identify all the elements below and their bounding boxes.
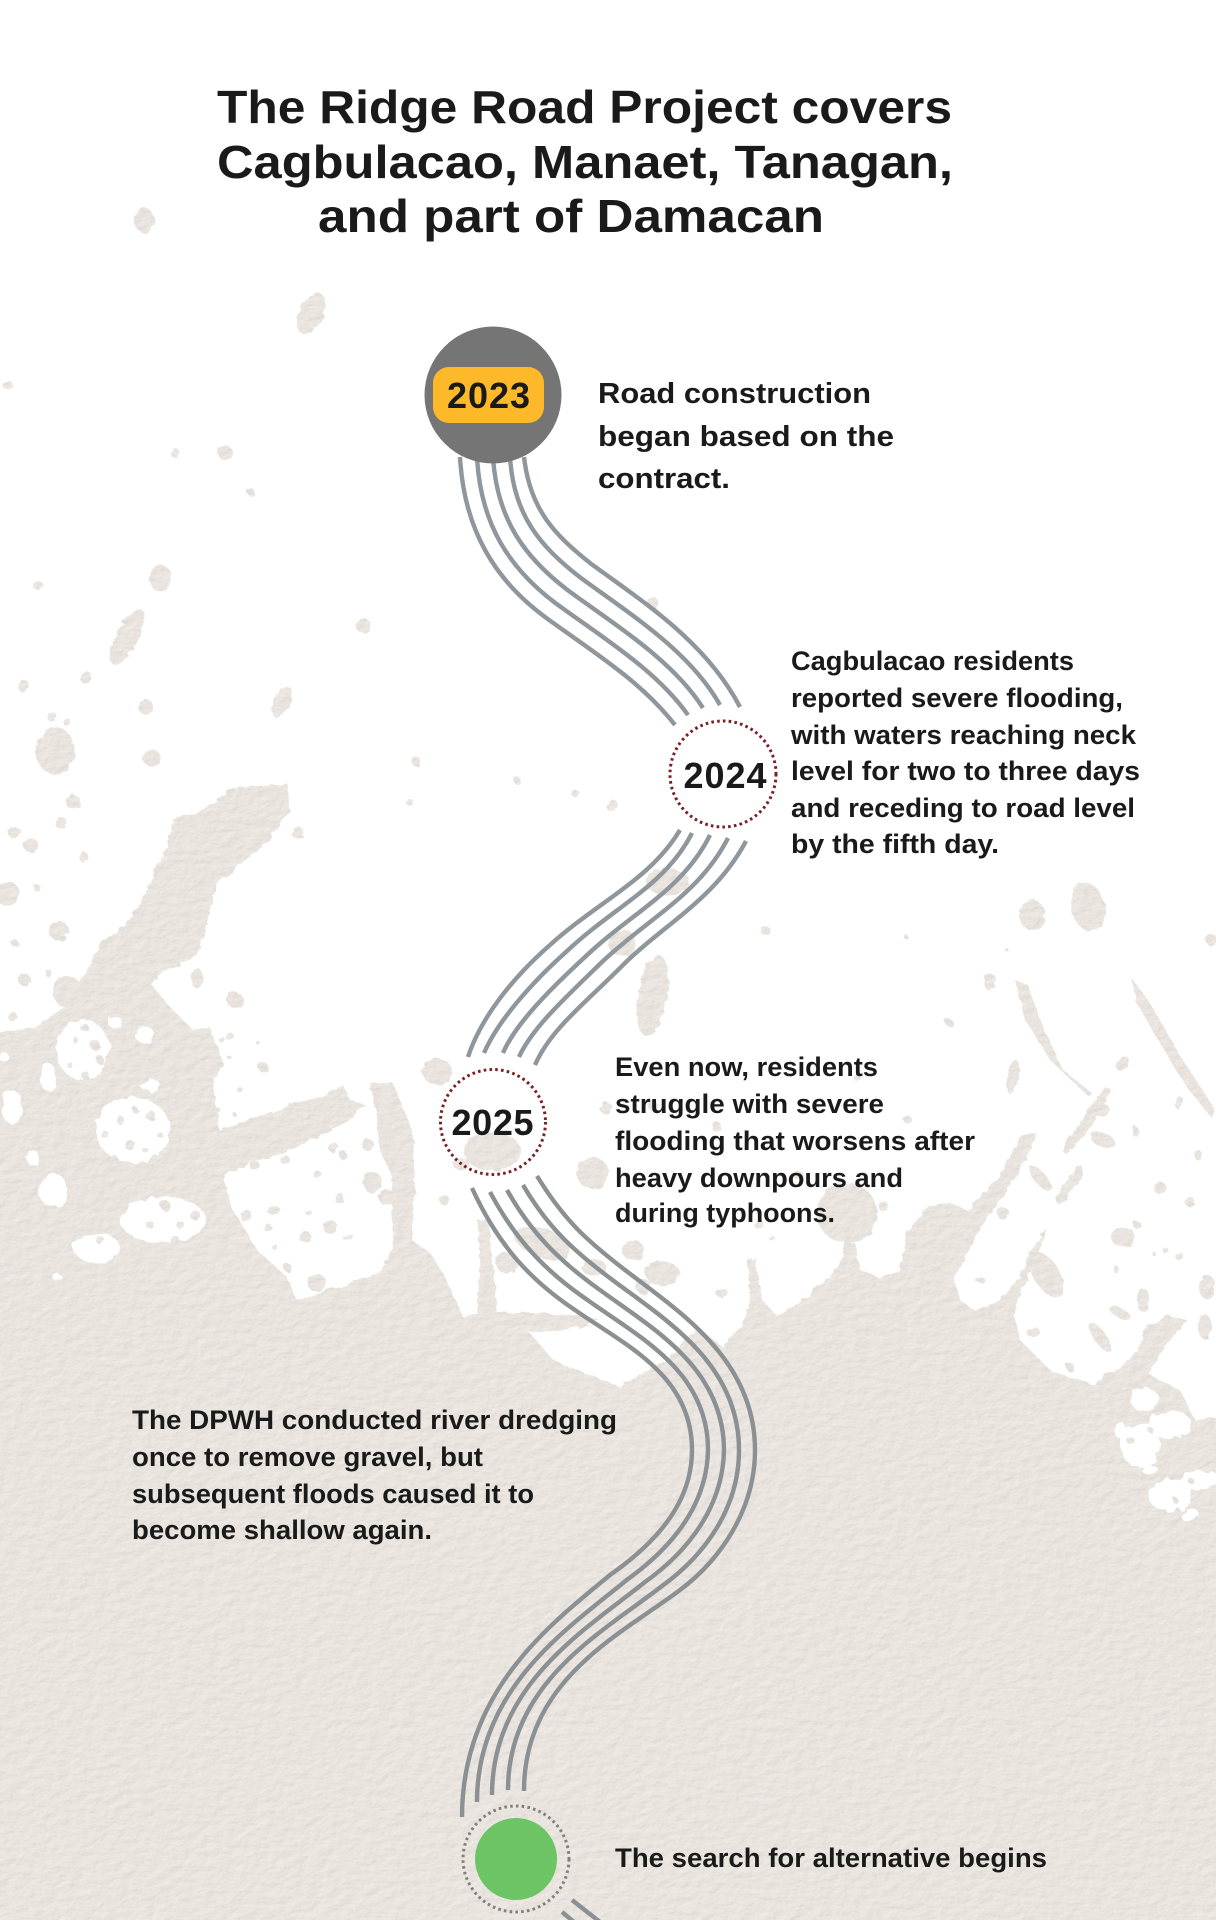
text: 2025 event (615, 1052, 975, 1228)
text: 2025 event: during typhoons. (615, 1198, 835, 1228)
text: 2023 event (598, 378, 894, 495)
title: The Ridge Road Project covers (217, 81, 952, 133)
text: DPWH dredging: subsequent floods caused it to (132, 1479, 534, 1509)
river ribbon: 2025 to green marker (462, 1176, 755, 1817)
river ribbon: continuing below green marker (562, 1900, 600, 1920)
title: and part of Damacan (318, 190, 824, 242)
white holes inside the splash (0, 1016, 1216, 1521)
text: 2024 event: and receding to road level (791, 793, 1135, 823)
text: DPWH dredging (132, 1405, 617, 1545)
text: DPWH dredging: The DPWH conducted river dredging (132, 1405, 617, 1435)
text: 2024 event: Cagbulacao residents (791, 646, 1074, 676)
marker: 2025 (440, 1070, 546, 1174)
text: 2024 event: reported severe flooding, (791, 683, 1123, 713)
text: search for alternative: The search for alternative begins (615, 1843, 1047, 1873)
right-side droplets and streaks (817, 1183, 877, 1243)
text: DPWH dredging: become shallow again. (132, 1515, 432, 1545)
text: 2025 event: flooding that worsens after (615, 1126, 975, 1156)
text: 2024 event: with waters reaching neck (790, 720, 1137, 750)
marker: 2023 (424, 326, 562, 464)
text: 2025 event: struggle with severe (615, 1089, 884, 1119)
river ribbon: 2024 to 2025 (468, 830, 746, 1065)
text: 2023 event: contract. (598, 463, 730, 495)
text: 2023 event: began based on the (598, 421, 894, 453)
river ribbon: 2023 to 2024 (460, 457, 740, 725)
marker: 2024: 2024 (684, 755, 766, 796)
text: 2024 event (790, 646, 1140, 859)
droplets inside the holes (67, 1024, 1193, 1503)
text: 2025 event: heavy downpours and (615, 1163, 903, 1193)
marker: 2024 (670, 721, 776, 827)
droplets beside the arm and in the bay (191, 968, 203, 988)
text: DPWH dredging: once to remove gravel, but (132, 1442, 483, 1472)
text: 2023 event: Road construction (598, 378, 871, 410)
text: 2025 event: Even now, residents (615, 1052, 878, 1082)
text: 2024 event: by the fifth day. (791, 829, 999, 859)
text: 2024 event: level for two to three days (791, 756, 1140, 786)
marker: green end point (463, 1806, 569, 1912)
marker: 2025: 2025 (452, 1102, 534, 1143)
marker: 2023: 2023 (447, 375, 530, 416)
title: Cagbulacao, Manaet, Tanagan, (217, 136, 953, 188)
title (217, 81, 953, 242)
